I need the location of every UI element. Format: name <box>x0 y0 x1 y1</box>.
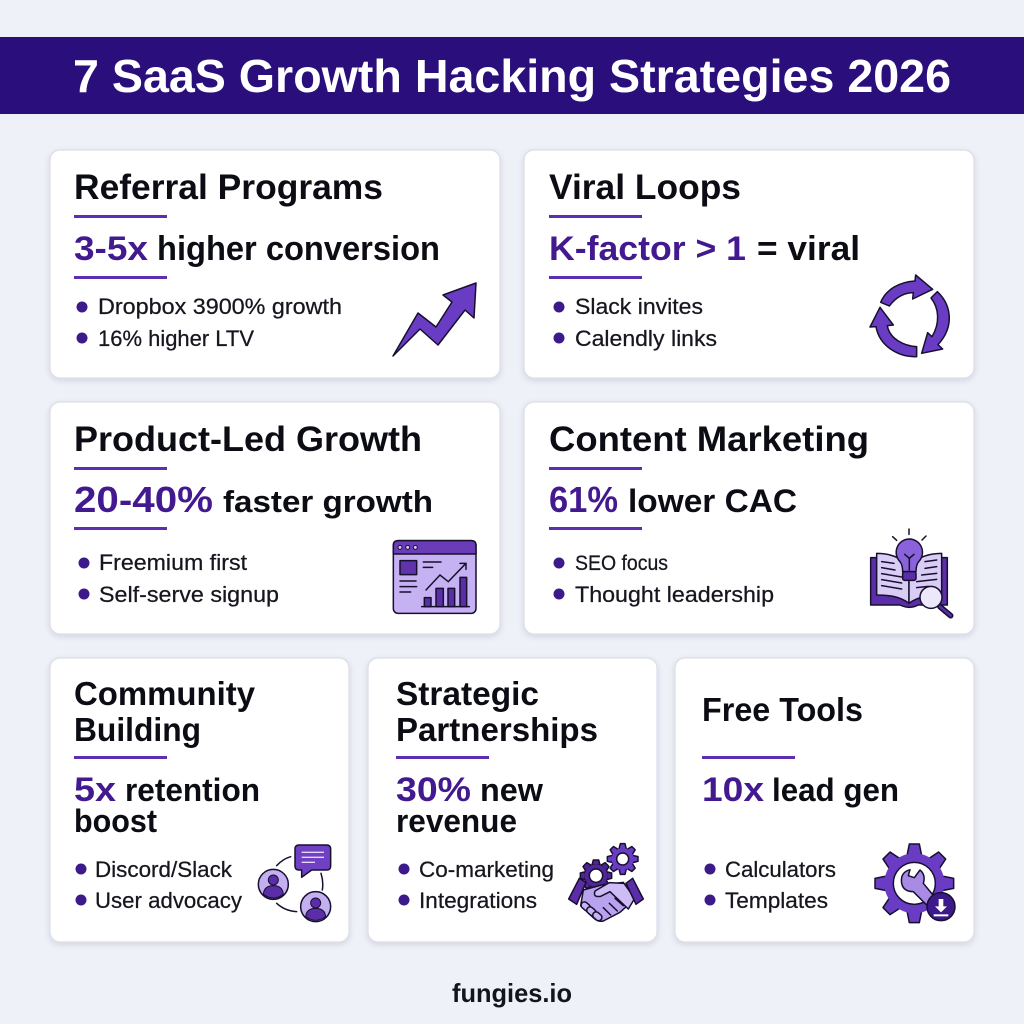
bullet list: Calendly links <box>575 326 717 351</box>
stat: 5x <box>74 771 116 809</box>
icon: circular arrows <box>870 275 949 357</box>
stat: lower CAC <box>628 483 797 519</box>
bullet list: Integrations <box>419 888 537 913</box>
stat <box>74 479 433 520</box>
stat: = viral <box>757 230 860 268</box>
bullet list: 16% higher LTV <box>98 326 254 351</box>
heading: Partnerships <box>396 711 598 748</box>
bullet list <box>76 857 242 913</box>
stat: new <box>480 772 543 808</box>
bullet list <box>398 857 554 913</box>
heading <box>396 675 598 748</box>
bullet list: Freemium first <box>99 550 247 575</box>
title: 7 SaaS Growth Hacking Strategies 2026 <box>73 50 951 102</box>
stat: 30% <box>396 771 471 809</box>
icon: book with light bulb and magnifier <box>871 529 951 616</box>
heading: Free Tools <box>702 691 863 728</box>
stat <box>702 771 899 809</box>
stat: 61% <box>549 479 618 520</box>
bullet list: Calculators <box>725 857 836 882</box>
stat: faster growth <box>223 484 433 519</box>
stat <box>396 771 543 839</box>
bullet list: Thought leadership <box>575 582 774 607</box>
stat: 3-5x <box>74 230 148 268</box>
panel: Community Building <box>50 658 349 942</box>
panel: Product-Led Growth <box>50 402 500 634</box>
stat: higher conversion <box>157 230 440 268</box>
bullet list: Templates <box>725 888 828 913</box>
heading <box>74 675 256 748</box>
bullet list: Discord/Slack <box>95 857 233 882</box>
panel: Viral Loops <box>524 150 974 378</box>
icon: handshake with gears <box>569 844 643 922</box>
panel: Referral Programs <box>50 150 500 378</box>
heading: Community <box>74 675 256 712</box>
bullet list <box>554 294 717 351</box>
bullet list: User advocacy <box>95 888 242 913</box>
bullet list: Co-marketing <box>419 857 554 882</box>
heading: Building <box>74 711 201 748</box>
panel: Strategic Partnerships <box>368 658 657 942</box>
bullet list <box>704 857 836 913</box>
bullet list <box>78 550 279 607</box>
stat: revenue <box>396 803 517 839</box>
stat: 10x <box>702 771 764 809</box>
bullet list: SEO focus <box>575 552 668 575</box>
panel: Free Tools <box>675 658 974 942</box>
heading: Referral Programs <box>74 168 383 207</box>
bullet list: Dropbox 3900% growth <box>98 294 342 319</box>
stat: boost <box>74 803 157 839</box>
stat <box>549 230 860 268</box>
panel: Content Marketing <box>524 402 974 634</box>
bullet list: Self-serve signup <box>99 582 279 607</box>
icon: gear with wrench and download <box>875 844 955 923</box>
heading: Strategic <box>396 675 539 712</box>
footer: fungies.io <box>452 978 572 1008</box>
stat <box>74 771 260 839</box>
bullet list <box>554 552 774 607</box>
icon: dashboard window <box>393 541 476 613</box>
bullet list <box>76 294 342 351</box>
stat: lead gen <box>772 772 899 808</box>
stat <box>549 479 797 520</box>
title banner <box>0 37 1024 114</box>
stat: 20-40% <box>74 479 213 520</box>
icon: rising arrow <box>393 283 476 356</box>
bullet list: Slack invites <box>575 294 703 319</box>
heading: Viral Loops <box>549 168 741 207</box>
icon: community chat <box>258 845 331 922</box>
heading: Product-Led Growth <box>74 420 422 459</box>
heading: Content Marketing <box>549 420 869 459</box>
stat: retention <box>125 772 260 808</box>
stat: K-factor > 1 <box>549 230 746 268</box>
